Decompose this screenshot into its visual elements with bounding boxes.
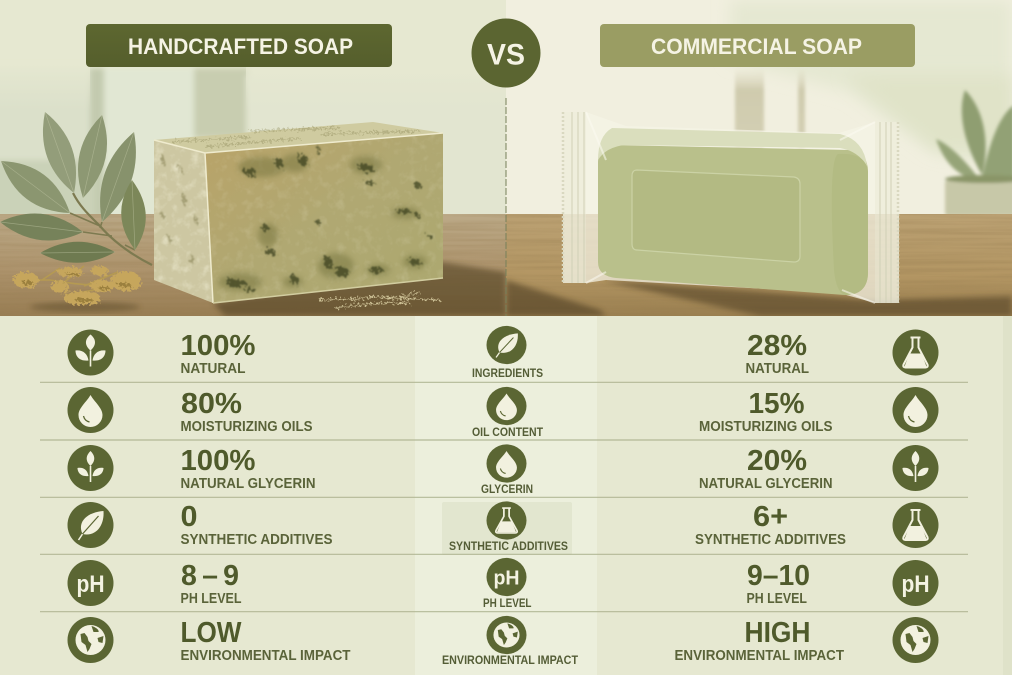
label: ENVIRONMENTAL IMPACT	[180, 648, 351, 664]
right row: natural	[746, 330, 938, 377]
label: OIL CONTENT	[472, 425, 544, 439]
shadows	[506, 280, 606, 316]
soap side shading	[846, 157, 868, 295]
icon: sprout	[892, 445, 938, 491]
icon: globe	[68, 617, 114, 663]
left row: environmental impact	[68, 617, 351, 664]
label: INGREDIENTS	[472, 366, 543, 380]
label: PH LEVEL	[483, 596, 532, 610]
wood grain	[506, 214, 1012, 271]
header: commercial soap	[600, 24, 915, 67]
diagonal wall shade	[874, 80, 1012, 146]
page background right	[506, 0, 1012, 316]
icon: pH: pH	[493, 568, 520, 589]
left row: moisturizing oils	[68, 387, 313, 435]
wrapped soap	[563, 112, 899, 303]
right row: natural glycerin	[699, 445, 938, 492]
label: MOISTURIZING OILS	[180, 419, 313, 435]
right row: moisturizing oils	[699, 387, 938, 435]
label: GLYCERIN	[481, 482, 533, 496]
soap front face	[205, 133, 443, 303]
soap body	[598, 145, 868, 295]
label: NATURAL GLYCERIN	[699, 476, 832, 492]
value: 80%	[181, 388, 242, 420]
VS badge	[472, 18, 540, 88]
right row: pH level	[746, 560, 938, 607]
icon: flask	[892, 330, 938, 376]
value: 9–10	[747, 560, 810, 592]
centre row: pH level	[483, 558, 532, 610]
row dividers	[40, 382, 968, 612]
wooden table	[506, 214, 1012, 316]
centre row: glycerin	[481, 444, 533, 496]
page background left	[0, 0, 506, 316]
value: 28%	[747, 330, 807, 362]
label: SYNTHETIC ADDITIVES	[180, 532, 333, 548]
soap top face	[154, 122, 443, 153]
soft fade into header	[0, 67, 90, 92]
label: PH LEVEL	[746, 591, 807, 607]
dried flowers	[13, 266, 141, 312]
bottom panel background	[0, 316, 1012, 675]
centre row: oil content	[472, 387, 544, 439]
icon: sprout	[68, 445, 114, 491]
embossed panel	[632, 170, 800, 262]
wooden table	[0, 214, 506, 316]
icon: pH: pH	[76, 571, 104, 598]
icon: pH: pH	[902, 571, 930, 598]
left row: synthetic additives	[68, 501, 333, 548]
wood grain	[0, 214, 506, 250]
right seal	[875, 122, 899, 303]
photo: handcrafted soap on wood	[0, 60, 516, 316]
icon: pH	[68, 560, 114, 606]
value: 100%	[180, 445, 256, 477]
icon: leaf	[68, 502, 114, 548]
label: ENVIRONMENTAL IMPACT	[442, 653, 579, 667]
icon: oil drop	[892, 387, 938, 433]
value: 8–9	[181, 560, 239, 592]
icon: globe	[486, 616, 527, 654]
photo: commercial soap on wood	[506, 0, 1012, 316]
label: NATURAL	[180, 361, 246, 377]
value: 15%	[748, 388, 804, 420]
soap bar	[150, 122, 445, 307]
label: MOISTURIZING OILS	[699, 419, 833, 435]
icon: flask	[486, 501, 527, 540]
header: handcrafted soap	[86, 24, 392, 67]
label: SYNTHETIC ADDITIVES	[695, 532, 846, 548]
value: 20%	[747, 445, 807, 477]
herb crumbs	[318, 292, 440, 308]
centre row: environmental impact	[442, 616, 579, 667]
centre row: synthetic additives	[449, 501, 568, 553]
label: SYNTHETIC ADDITIVES	[449, 539, 568, 553]
synthetic additives highlight	[442, 502, 572, 555]
plant	[936, 90, 1012, 216]
icon: globe	[892, 617, 938, 663]
soap side face	[154, 140, 213, 303]
left row: natural	[68, 330, 256, 377]
header: commercial soap: COMMERCIAL SOAP	[651, 34, 862, 59]
soap shadow	[213, 262, 506, 316]
value: 100%	[180, 330, 256, 362]
value: 6+	[753, 501, 788, 533]
header: handcrafted soap: HANDCRAFTED SOAP	[128, 34, 353, 59]
soap highlight edges	[154, 133, 443, 303]
icon: oil drop	[486, 387, 527, 425]
left row: natural glycerin	[68, 445, 316, 492]
blurred window frames	[734, 72, 806, 149]
wrapper film	[586, 112, 875, 303]
centre row: ingredients	[472, 326, 543, 380]
icon: pH	[892, 560, 938, 606]
green wall tint	[732, 2, 1010, 88]
label: ENVIRONMENTAL IMPACT	[674, 648, 844, 664]
right edge stripe	[1003, 316, 1012, 675]
VS badge: VS	[487, 38, 525, 72]
right row: synthetic additives	[695, 501, 938, 548]
centre column panel	[415, 316, 597, 675]
soap top band	[598, 128, 867, 166]
olive branch	[0, 112, 152, 265]
icon: leaf	[486, 326, 527, 364]
value: LOW	[180, 617, 242, 649]
icon: flask	[892, 502, 938, 548]
right row: environmental impact	[674, 617, 938, 664]
value: 0	[180, 501, 198, 533]
value: HIGH	[744, 617, 810, 649]
label: NATURAL GLYCERIN	[180, 476, 316, 492]
film highlights	[586, 112, 875, 303]
left seal	[563, 112, 586, 283]
dashed centre divider	[505, 98, 507, 316]
left row: pH level	[68, 560, 242, 607]
icon: drop	[486, 444, 527, 483]
icon: oil drop	[68, 387, 114, 433]
label: PH LEVEL	[180, 591, 242, 607]
icon: sprout	[68, 330, 114, 376]
blurred window and wall shading	[0, 67, 248, 214]
label: NATURAL	[746, 361, 809, 377]
